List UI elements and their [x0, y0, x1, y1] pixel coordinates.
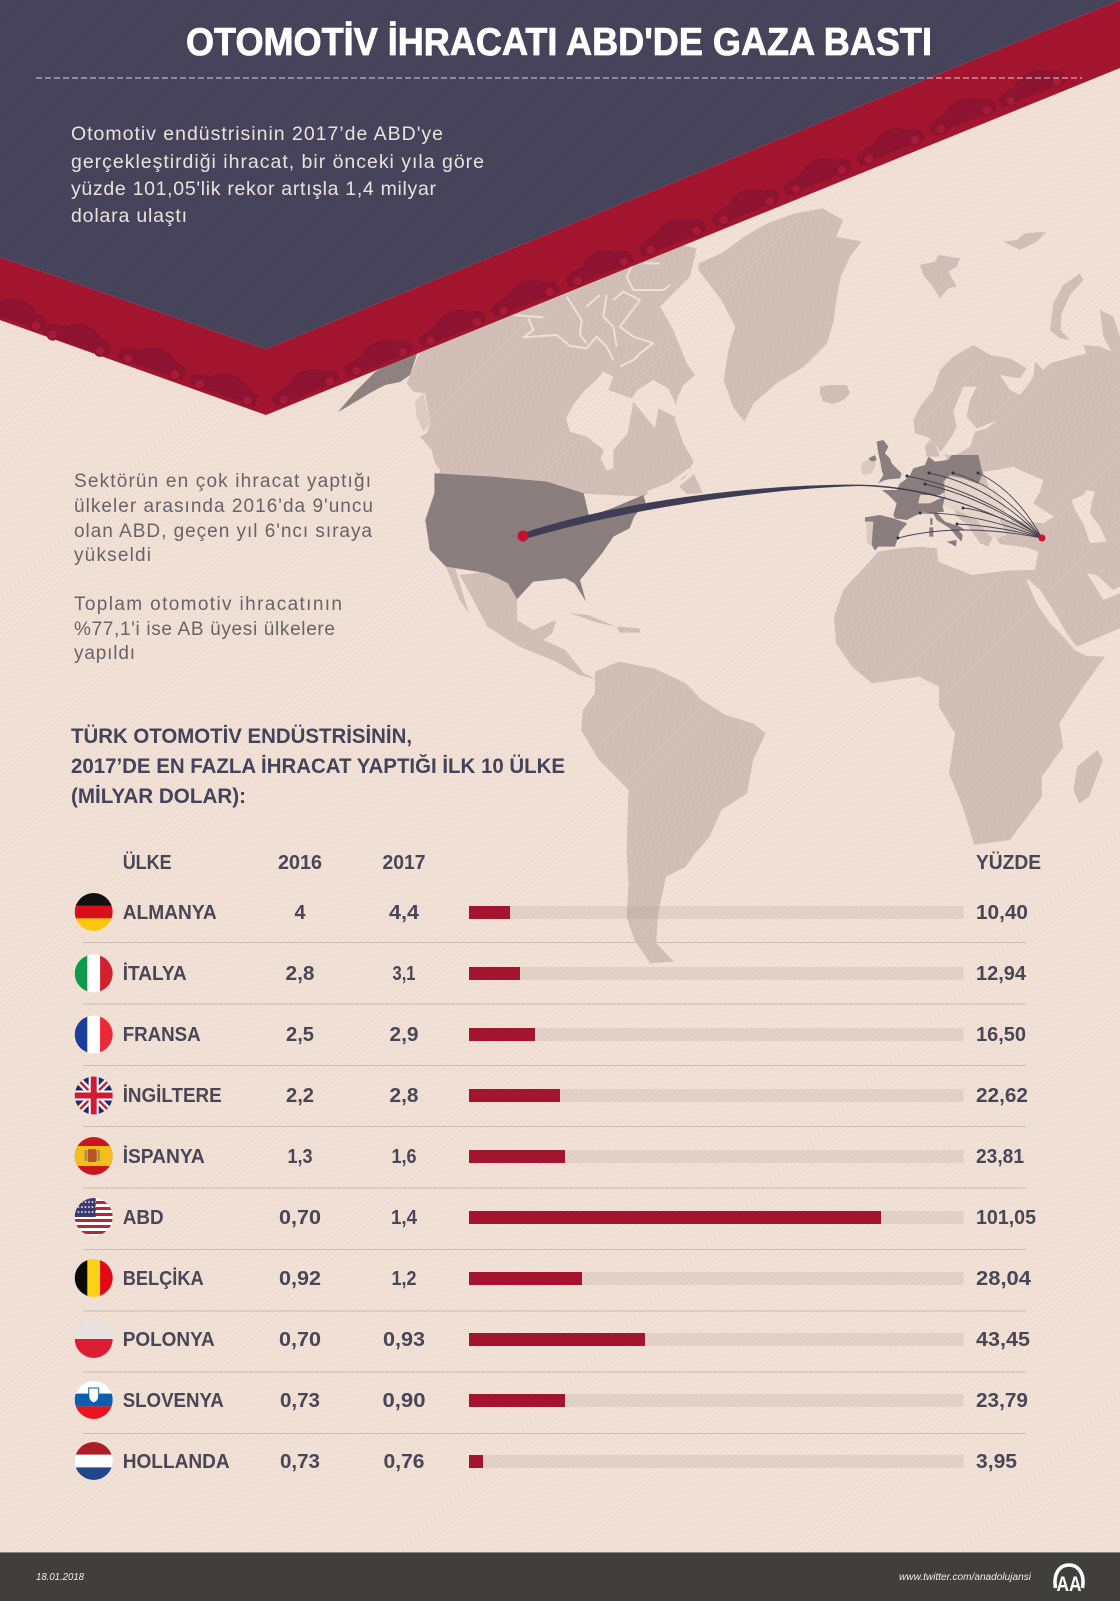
Baltic [940, 387, 997, 457]
map: European export destinations [861, 440, 1007, 551]
row: Hollanda [75, 1442, 1017, 1480]
table column headers: YÜZDE [976, 851, 1041, 874]
row: Hollanda: 0,73 [280, 1451, 320, 1473]
intro text [71, 123, 484, 227]
row: Hollanda: HOLLANDA [123, 1451, 230, 1473]
row: Polonya: 43,45 [976, 1329, 1030, 1351]
row: Fransa [75, 1016, 1026, 1054]
bar: Hollanda [469, 1455, 964, 1468]
row: Slovenya [75, 1381, 1028, 1419]
row: ABD: 0,70 [279, 1207, 321, 1229]
row: İtalya: 2,8 [286, 963, 314, 985]
dark header panel [0, 0, 1120, 349]
header band [0, 0, 1120, 415]
logo: AA: AA [1056, 1573, 1082, 1596]
row: Almanya: 4 [294, 902, 306, 924]
row: Hollanda: 0,76 [384, 1451, 424, 1473]
bar: Slovenya [469, 1394, 964, 1407]
flag: USA [75, 1198, 113, 1236]
row: Polonya: 0,93 [383, 1329, 425, 1351]
table heading [71, 723, 565, 808]
row: İngiltere: 22,62 [976, 1085, 1028, 1107]
central Europe [943, 477, 1007, 538]
side text: yapıldı [74, 643, 135, 664]
row: Polonya [75, 1320, 1030, 1358]
bar: İspanya [469, 1150, 964, 1163]
side text: %77,1'i ise AB üyesi ülkelere [74, 619, 335, 640]
row: Slovenya: 0,90 [382, 1390, 426, 1412]
row: Belçika: BELÇİKA [123, 1267, 204, 1290]
row: İngiltere: 2,8 [390, 1085, 418, 1107]
row: İngiltere: 2,2 [286, 1085, 314, 1107]
bar: Fransa [469, 1028, 964, 1041]
Switzerland [918, 495, 942, 503]
flag: France [75, 1016, 113, 1054]
map: Eurasia, Africa [820, 232, 1120, 845]
row: İspanya: 1,6 [392, 1146, 416, 1168]
logo: AA [1055, 1565, 1083, 1596]
Africa [834, 547, 1105, 845]
row: Almanya: 4,4 [389, 902, 420, 924]
row: ABD: 1,4 [391, 1207, 418, 1229]
table heading: 2017’DE EN FAZLA İHRACAT YAPTIĞI İLK 10 ÜLKE [71, 753, 565, 778]
seas [983, 467, 1054, 523]
flag: United Kingdom [75, 1076, 113, 1114]
row: İngiltere: İNGİLTERE [123, 1084, 222, 1107]
row: Fransa: 16,50 [976, 1024, 1026, 1046]
map: USA [425, 473, 646, 602]
flag: Italy [75, 954, 113, 992]
side text: Sektörün en çok ihracat yaptığı [74, 471, 371, 492]
intro text: dolara ulaştı [71, 205, 187, 227]
date: 18.01.2018 [36, 1572, 84, 1583]
Madagascar [1073, 750, 1103, 803]
row: İtalya: 12,94 [976, 963, 1027, 985]
row: İspanya: 23,81 [976, 1146, 1024, 1168]
world map [338, 208, 1120, 963]
row: Belçika [75, 1259, 1032, 1297]
source url: www.twitter.com/anadolujansi [899, 1572, 1032, 1583]
flag: Germany [75, 893, 113, 931]
South America [581, 662, 766, 963]
intro text: Otomotiv endüstrisinin 2017’de ABD'ye [71, 123, 443, 145]
bar: Belçika [469, 1272, 964, 1285]
row: ABD: ABD [123, 1207, 164, 1229]
Ireland [861, 460, 876, 475]
row: Hollanda: 3,95 [976, 1451, 1017, 1473]
side text: olan ABD, geçen yıl 6'ncı sıraya [74, 521, 372, 542]
table column headers: 2016 [278, 852, 322, 874]
title: OTOMOTİV İHRACATI ABD'DE GAZA BASTI [186, 21, 932, 64]
row: İtalya: İTALYA [123, 962, 187, 985]
row: İspanya: İSPANYA [123, 1145, 205, 1168]
marker: USA [518, 530, 528, 542]
bar: Polonya [469, 1333, 964, 1346]
Portugal [866, 522, 874, 545]
Newfoundland gulf [648, 469, 690, 493]
bar: ABD [469, 1211, 964, 1224]
side text: Toplam otomotiv ihracatının [74, 594, 342, 615]
flag: Belgium [75, 1259, 113, 1297]
row: ABD: 101,05 [976, 1207, 1036, 1229]
table heading: TÜRK OTOMOTİV ENDÜSTRİSİNİN, [71, 723, 412, 748]
row: Almanya: ALMANYA [123, 902, 217, 924]
flag: Spain [75, 1137, 113, 1175]
row: İtalya [75, 954, 1027, 992]
table column headers: ÜLKE [123, 851, 172, 874]
row: İtalya: 3,1 [392, 963, 416, 985]
row: Belçika: 1,2 [392, 1268, 416, 1290]
intro text: yüzde 101,05'lik rekor artışla 1,4 milyar [71, 178, 436, 200]
row: Belçika: 0,92 [279, 1268, 321, 1290]
row: Polonya: 0,70 [279, 1329, 321, 1351]
flag: Poland [75, 1320, 113, 1358]
row: İspanya: 1,3 [288, 1146, 312, 1168]
row: Slovenya: SLOVENYA [123, 1390, 224, 1412]
row: İspanya [75, 1137, 1024, 1175]
arcs: Turkey to European countries [898, 473, 1042, 538]
row: Fransa: 2,5 [286, 1024, 314, 1046]
side text: ülkeler arasında 2016'da 9'uncu [74, 496, 373, 517]
destination dots [896, 472, 980, 540]
table heading: (MİLYAR DOLAR): [71, 784, 246, 808]
arc: Turkey to USA [523, 485, 1042, 539]
table column headers: 2017 [382, 852, 426, 874]
Mexico and Central America [460, 572, 597, 680]
side text: yükseldi [74, 545, 151, 566]
row: Almanya [75, 893, 1028, 931]
flag: Slovenia [75, 1381, 113, 1419]
bar: Almanya [469, 906, 964, 919]
row: Fransa: 2,9 [390, 1024, 418, 1046]
row: Belçika: 28,04 [976, 1268, 1032, 1290]
row: ABD [75, 1198, 1036, 1236]
row: Almanya: 10,40 [976, 902, 1028, 924]
car row on band [0, 60, 1069, 410]
bar: İtalya [469, 967, 964, 980]
row: Fransa: FRANSA [123, 1024, 201, 1046]
Alaska [338, 345, 420, 412]
row: İngiltere [75, 1076, 1028, 1114]
footer [0, 1552, 1120, 1601]
flag: Netherlands [75, 1442, 113, 1480]
side text [74, 471, 373, 664]
row: Slovenya: 23,79 [976, 1390, 1028, 1412]
red chevron band [0, 0, 1120, 415]
Greenland [698, 208, 861, 422]
table column headers [123, 851, 1041, 874]
table rows [75, 893, 1036, 1480]
map: North America and Greenland [338, 208, 861, 680]
marker: Turkey [1038, 534, 1046, 542]
row: Slovenya: 0,73 [280, 1390, 320, 1412]
row: Polonya: POLONYA [123, 1329, 215, 1351]
intro text: gerçekleştirdiği ihracat, bir önceki yıla göre [71, 151, 484, 173]
bar: İngiltere [469, 1089, 964, 1102]
